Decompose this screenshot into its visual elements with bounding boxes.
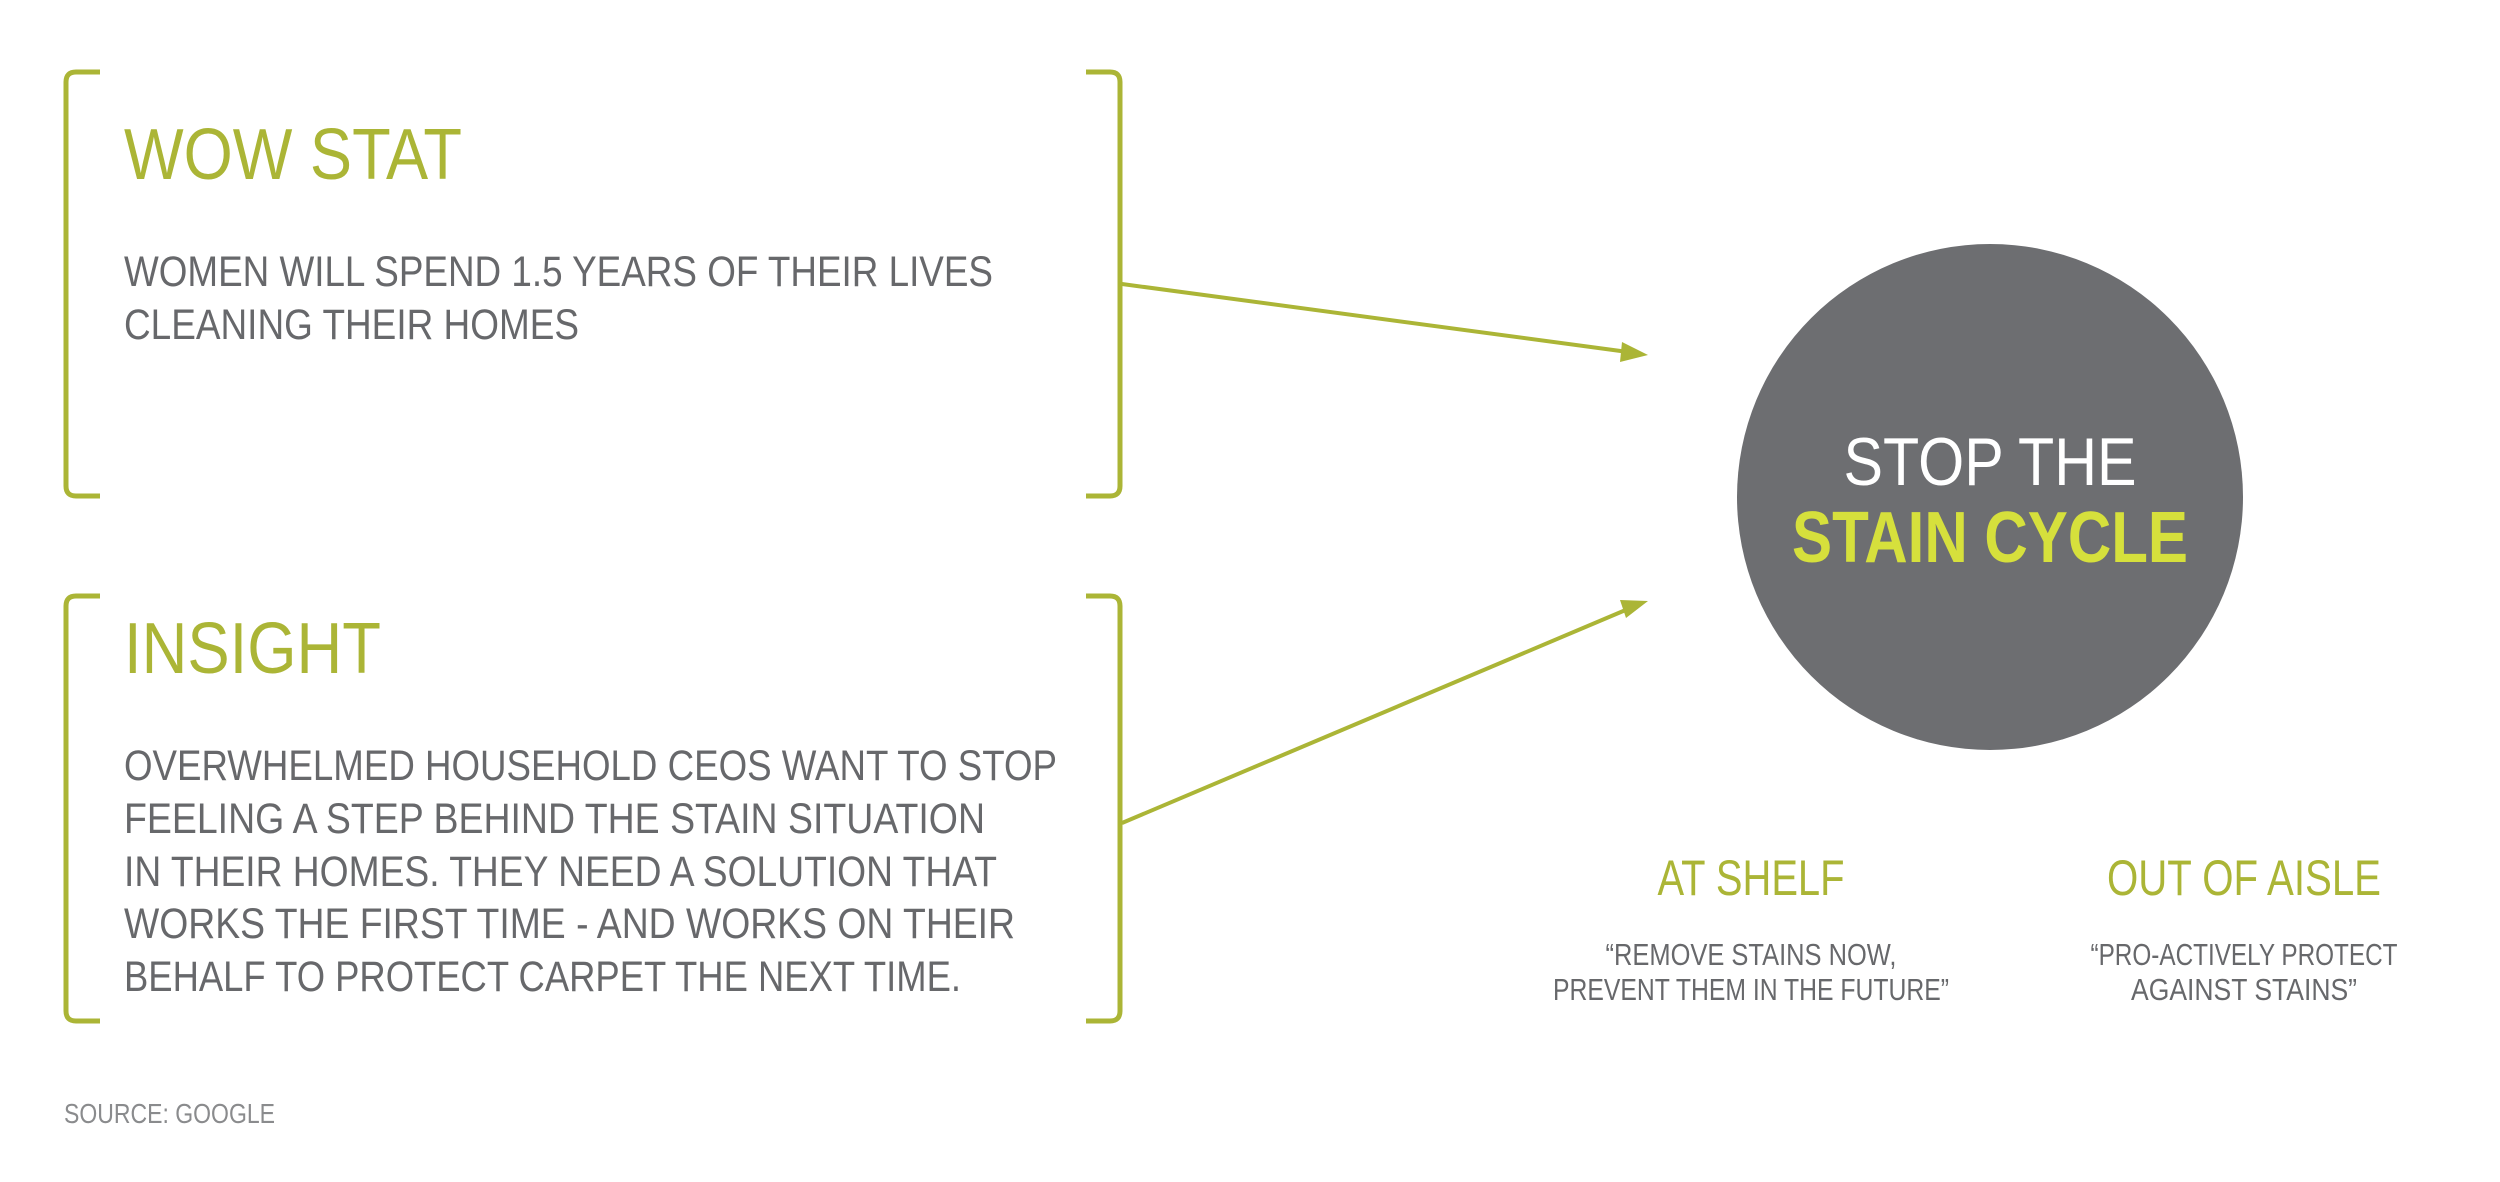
arrow: insight to circle	[1122, 600, 1648, 823]
column: out of aisle: OUT OF AISLE	[2107, 850, 2381, 906]
bracket: insight	[66, 596, 1120, 1021]
bracket: wow stat	[66, 72, 1120, 496]
column: at shelf: “REMOVE STAINS NOW,	[1606, 937, 1896, 972]
source note: SOURCE: GOOGLE	[64, 1098, 275, 1129]
text block: insight: FEELING A STEP BEHIND THE STAIN SITUATION	[124, 795, 985, 843]
panel: wow stat	[66, 72, 1120, 496]
heading: wow stat: WOW STAT	[124, 115, 462, 195]
text block: wow stat: CLEANING THEIR HOMES	[124, 301, 579, 349]
column: out of aisle: “PRO-ACTIVELY PROTECT	[2090, 937, 2398, 972]
text block: insight: WORKS THE FIRST TIME - AND WORKS ON THEIR	[124, 900, 1015, 948]
text block: wow stat: WOMEN WILL SPEND 1.5 YEARS OF THEIR LIVES	[124, 248, 993, 296]
circle: stop the stain cycle	[1737, 244, 2243, 750]
column: at shelf	[1553, 850, 1949, 1007]
arrow: wow stat to circle	[1122, 284, 1648, 362]
panel: insight	[66, 596, 1120, 1021]
text block: insight: OVERWHELMED HOUSEHOLD CEOS WANT TO STOP	[124, 742, 1057, 790]
circle text: stain cycle: STAIN CYCLE	[1792, 498, 2188, 578]
text block: insight	[124, 742, 1057, 1001]
column: at shelf: AT SHELF	[1658, 850, 1844, 906]
column: out of aisle: AGAINST STAINS”	[2131, 972, 2357, 1007]
text block: wow stat	[124, 248, 993, 349]
column: at shelf: PREVENT THEM IN THE FUTURE”	[1553, 972, 1949, 1007]
text block: insight: BEHALF TO PROTECT CARPET THE NEXT TIME.	[124, 953, 961, 1001]
heading: insight: INSIGHT	[124, 609, 381, 689]
circle text: stop the: STOP THE	[1844, 424, 2136, 500]
text block: insight: IN THEIR HOMES. THEY NEED A SOLUTION THAT	[124, 848, 997, 896]
column: out of aisle	[2090, 850, 2398, 1007]
